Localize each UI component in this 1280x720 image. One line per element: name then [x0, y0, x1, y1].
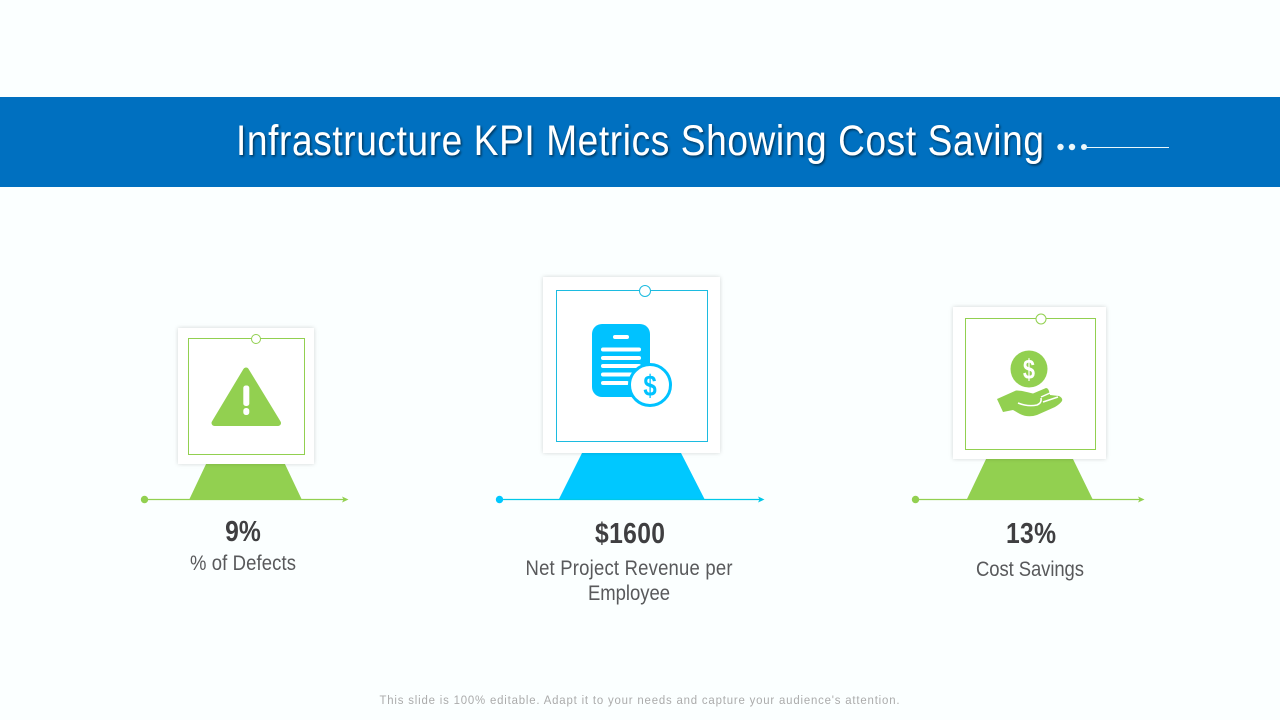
title ornament: dots and line [1057, 144, 1169, 150]
timeline arrow [141, 496, 348, 503]
label [526, 557, 733, 605]
pedestal [558, 451, 705, 500]
value: $1600 [595, 517, 665, 549]
icon: hand holding dollar coin: $ [1023, 354, 1035, 386]
footer note: This slide is 100% editable. Adapt it to your needs and capture your audience's attention. [379, 694, 900, 707]
icon: document with dollar coin: $ [643, 368, 657, 403]
card [953, 307, 1106, 459]
icon: document with dollar coin [592, 324, 670, 406]
pedestal [966, 457, 1093, 500]
timeline arrow [496, 496, 764, 503]
title: Infrastructure KPI Metrics Showing Cost Saving [236, 117, 1044, 165]
panel: defects KPI [141, 328, 348, 575]
panel: revenue KPI [496, 277, 764, 605]
value: 13% [1006, 517, 1056, 549]
timeline arrow [912, 496, 1144, 503]
label: % of Defects [190, 552, 296, 575]
label: Cost Savings [976, 558, 1084, 581]
icon: warning triangle [214, 370, 278, 423]
panel: cost savings KPI [912, 307, 1144, 581]
icon: hand holding dollar coin [997, 350, 1062, 416]
card [178, 328, 314, 464]
value: 9% [225, 515, 261, 547]
label: Net Project Revenue per [526, 557, 733, 580]
header band [0, 97, 1280, 187]
card [543, 277, 720, 453]
label: Employee [588, 582, 670, 605]
pedestal [189, 462, 302, 500]
